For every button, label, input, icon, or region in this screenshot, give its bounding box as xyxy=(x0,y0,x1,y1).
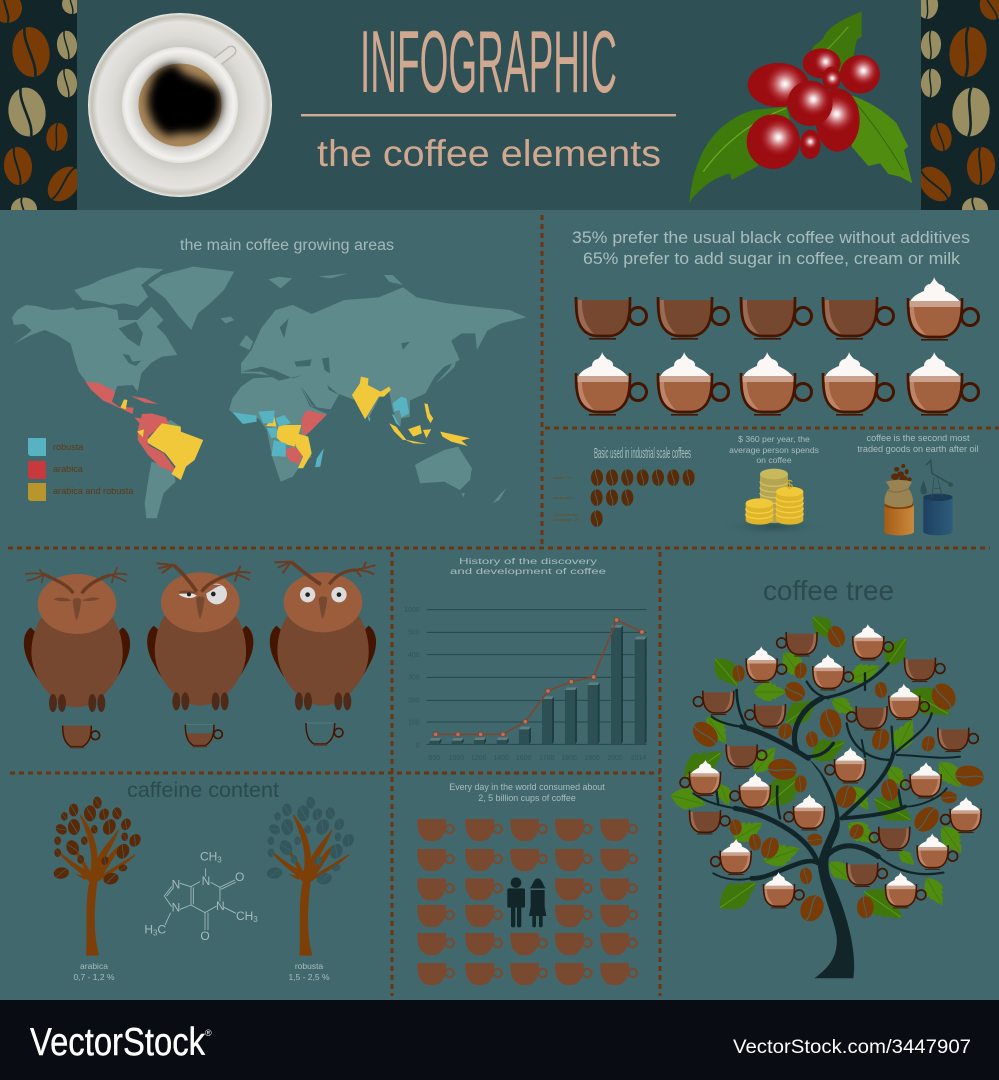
heading: coffee tree: coffee tree xyxy=(763,575,894,606)
variety labels xyxy=(553,476,580,522)
cup: half full xyxy=(185,725,222,747)
line and bar chart: 1900 xyxy=(584,755,600,762)
caffeine molecule: 3 xyxy=(253,915,258,924)
legend: arabica: arabica xyxy=(53,464,84,474)
map regions: arabica and robusta xyxy=(121,377,470,480)
variety labels: robusta 30% xyxy=(553,496,572,500)
heading: daily consumption xyxy=(449,782,605,803)
line and bar chart: 1600 xyxy=(516,755,532,762)
header band xyxy=(0,0,999,220)
footer logo text: VectorStock xyxy=(30,1021,205,1064)
caffeine molecule: 3 xyxy=(153,928,158,937)
heading: preference percentages xyxy=(572,228,970,268)
panel: industrial coffee varieties: Basic used in industrial scale coffees xyxy=(594,445,691,462)
caffeine molecule: O xyxy=(200,929,210,943)
line and bar chart: 1200 xyxy=(471,755,487,762)
leaves xyxy=(668,610,970,929)
legend: robusta: robusta xyxy=(53,442,84,452)
caffeine molecule: 3 xyxy=(217,856,222,865)
icon: man and woman xyxy=(507,877,546,927)
line xyxy=(436,620,642,734)
cups row 2 xyxy=(576,352,978,416)
heading: preference percentages: 65% prefer to add sugar in coffee, cream or milk xyxy=(583,249,961,268)
variety labels: arabica 70% xyxy=(553,476,572,480)
line and bar chart: 400 xyxy=(408,652,420,659)
text: 360 per year: $ 360 per year, the xyxy=(738,434,810,444)
left bean strip xyxy=(0,0,77,210)
caffeine molecule: N xyxy=(216,899,225,913)
cup: empty xyxy=(306,723,343,746)
panel: coffee tree xyxy=(668,575,986,978)
heading: main coffee growing areas: the main coffee growing areas xyxy=(180,237,394,254)
line and bar chart: 1800 xyxy=(561,755,577,762)
line and bar chart: 1400 xyxy=(493,755,509,762)
line and bar chart: 2000 xyxy=(607,755,623,762)
beans xyxy=(688,623,986,926)
cup grid xyxy=(417,819,637,985)
line and bar chart: 1700 xyxy=(539,755,555,762)
variety labels: maragogype - 2% xyxy=(553,518,580,522)
legend: arabica and robusta: arabica and robusta xyxy=(53,486,134,496)
variety labels: Liberica excelsa xyxy=(553,513,577,517)
text: 360 per year xyxy=(729,434,819,465)
owl: half awake xyxy=(147,563,253,710)
heading: caffeine content: caffeine content xyxy=(127,779,279,802)
dashed section dividers xyxy=(8,215,999,996)
line and bar chart xyxy=(404,607,647,762)
subtitle: the coffee elements: the coffee elements xyxy=(317,133,661,174)
icon: coffee cup top view xyxy=(88,13,272,197)
line and bar chart: 1000 xyxy=(404,607,420,614)
icon: coffee berries and leaves xyxy=(689,12,912,203)
heading: daily consumption: Every day in the world consumed about xyxy=(449,782,605,792)
text: 360 per year: on coffee xyxy=(756,455,792,465)
panel: history chart xyxy=(404,556,647,762)
label: robusta: robusta xyxy=(295,961,323,971)
label: robusta: 1,5 - 2,5 % xyxy=(288,972,330,982)
caffeine molecule xyxy=(144,850,258,943)
tree: arabica xyxy=(53,796,143,955)
panel: owls xyxy=(24,562,376,748)
icon: coffee sack and oil barrel xyxy=(884,461,953,535)
panel: coffee preference xyxy=(572,228,978,416)
map regions: arabica xyxy=(85,382,326,472)
caffeine molecule: N xyxy=(172,901,180,915)
heading: history of coffee xyxy=(450,556,606,576)
line and bar chart: 0 xyxy=(416,742,420,749)
caffeine molecule: C xyxy=(157,922,166,936)
heading: preference percentages: 35% prefer the usual black coffee without additives xyxy=(572,228,970,247)
owl: awake xyxy=(270,562,376,710)
heading: history of coffee: History of the discovery xyxy=(459,556,598,566)
caffeine molecule: CH xyxy=(236,909,253,923)
footer bar xyxy=(0,1000,999,1080)
panel: world map xyxy=(12,237,526,518)
dark cups xyxy=(690,632,978,887)
tree illustration xyxy=(668,610,986,978)
map regions: robusta xyxy=(232,397,409,467)
header band: INFOGRAPHIC xyxy=(360,12,617,111)
line and bar chart: 850 xyxy=(429,755,440,762)
caffeine molecule: N xyxy=(202,874,210,888)
panel: daily cups xyxy=(417,782,637,985)
line and bar chart: 500 xyxy=(408,630,420,637)
line and bar chart: 300 xyxy=(408,675,420,682)
label: robusta xyxy=(288,961,330,982)
caffeine molecule: N xyxy=(172,877,180,891)
registered mark: ® xyxy=(205,1028,212,1038)
owl: sleeping xyxy=(24,567,130,712)
icon: coin stacks xyxy=(715,469,832,537)
cream cups xyxy=(680,624,981,908)
bars xyxy=(429,628,645,744)
panel: industrial coffee varieties xyxy=(553,433,979,537)
icon: coin stacks: $ xyxy=(786,478,793,492)
cups row 1 xyxy=(576,277,978,341)
panel: caffeine content xyxy=(53,779,356,982)
trunk and branches xyxy=(693,663,960,978)
heading: daily consumption: 2, 5 billion cups of coffee xyxy=(478,793,576,803)
heading: history of coffee: and development of coffee xyxy=(450,566,606,576)
tree: robusta xyxy=(266,796,356,955)
label: arabica: 0,7 - 1,2 % xyxy=(73,972,115,982)
text: second most traded goods: coffee is the second most xyxy=(867,433,970,443)
bean rows xyxy=(591,469,695,527)
cup: full xyxy=(63,726,100,748)
line and bar chart: 200 xyxy=(408,698,420,705)
caffeine molecule: H xyxy=(144,922,153,936)
right bean strip xyxy=(921,0,999,210)
text: second most traded goods: traded goods on earth after oil xyxy=(857,444,979,454)
line and bar chart: 2014 xyxy=(631,755,647,762)
world map xyxy=(12,267,526,518)
text: second most traded goods xyxy=(857,433,979,454)
line and bar chart: 1000 xyxy=(449,755,464,762)
footer image id: VectorStock.com/3447907 xyxy=(733,1037,971,1058)
caffeine molecule: CH xyxy=(200,850,217,864)
text: 360 per year: average person spends xyxy=(729,445,819,455)
label: arabica xyxy=(73,961,115,982)
line and bar chart: 100 xyxy=(408,719,420,726)
legend xyxy=(28,438,134,501)
label: arabica: arabica xyxy=(80,961,108,971)
caffeine molecule: O xyxy=(235,870,244,884)
